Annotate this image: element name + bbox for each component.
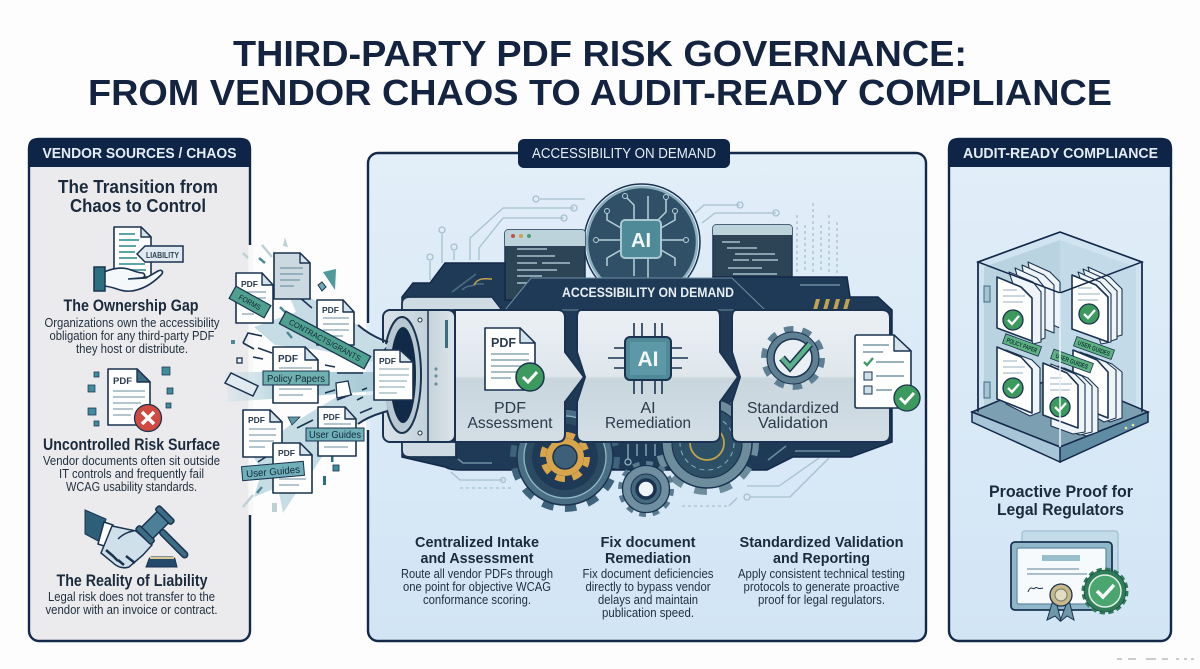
document: forms [229, 273, 273, 323]
fix document remediation text: delays and maintain [598, 593, 698, 607]
document stack: bottom left: POLICY PAPER [1005, 337, 1038, 355]
accessibility header plate: ACCESSIBILITY ON DEMAND [562, 285, 734, 300]
machine body [402, 263, 892, 470]
label: Standardized [747, 400, 839, 417]
yellow gear [543, 435, 587, 479]
icon: failing PDF: PDF [113, 376, 132, 387]
tag: user guides lower: User Guides [246, 465, 301, 480]
label [747, 400, 839, 432]
panel header: audit-ready: AUDIT-READY COMPLIANCE [963, 146, 1158, 162]
document: PDF upper right: PDF [322, 305, 339, 315]
text block: ownership gap: The Ownership Gap [64, 297, 198, 315]
centralized intake text: conformance scoring. [423, 593, 531, 607]
title: FROM VENDOR CHAOS TO AUDIT-READY COMPLIANCE [88, 72, 1112, 113]
fix document remediation text: Fix document [600, 534, 696, 551]
document: lower left [243, 410, 282, 457]
document: policy papers [263, 347, 329, 403]
cylinder housing [383, 297, 502, 457]
icon: liability document and hand: LIABILITY [146, 251, 180, 260]
text block: uncontrolled risk surface: IT controls and frequently fail [59, 467, 204, 481]
label: PDF [494, 400, 526, 417]
document stack: bottom left [997, 334, 1042, 416]
standardized validation text [738, 534, 905, 607]
circuit lines [427, 196, 837, 506]
AI chip: AI [631, 230, 651, 252]
standardized validation text: protocols to generate proactive [744, 580, 900, 594]
icon: failing PDF [88, 367, 173, 432]
label [468, 400, 553, 432]
text block: uncontrolled risk surface [43, 436, 220, 494]
text block: uncontrolled risk surface: Uncontrolled Risk Surface [43, 436, 220, 454]
heading: proactive proof [989, 483, 1134, 519]
document: forms: PDF [241, 279, 258, 289]
text block: reality of liability: vendor with an invoice or contract. [46, 603, 218, 617]
fix document remediation text: Fix document deficiencies [582, 567, 714, 581]
glass cabinet of documents [972, 232, 1148, 462]
document: policy papers: PDF [278, 354, 298, 365]
document: entering cylinder: PDF [379, 356, 396, 366]
document: gray [274, 253, 310, 299]
vendor document chaos stream [225, 237, 413, 515]
document stack: top right [1072, 267, 1122, 344]
text block: reality of liability: The Reality of Liability [56, 572, 208, 590]
faint footer mark [1117, 658, 1194, 660]
badge [1084, 570, 1126, 612]
panel: accessibility on demand [368, 139, 926, 641]
label [605, 400, 691, 432]
icon: checklist [855, 335, 920, 411]
icon: handshake and gavel [85, 505, 199, 569]
browser window left [505, 230, 585, 302]
tag: user guides right: User Guides [309, 430, 361, 441]
fix document remediation text [582, 534, 714, 620]
centralized intake text: one point for objective WCAG [403, 580, 551, 594]
tag: forms: FORMS [237, 293, 262, 312]
AI circuit circle [584, 184, 700, 300]
text block: ownership gap [44, 297, 220, 356]
label: Assessment [468, 415, 553, 432]
text block: reality of liability: Legal risk does not transfer to the [48, 590, 215, 604]
heading: transition: The Transition from [58, 177, 218, 197]
heading: proactive proof: Legal Regulators [997, 501, 1124, 519]
step 1 card [455, 310, 584, 442]
title: THIRD-PARTY PDF RISK GOVERNANCE: [233, 33, 967, 74]
heading: transition: Chaos to Control [70, 196, 206, 216]
gear: large dark [514, 406, 616, 508]
code window right [713, 225, 792, 297]
document: lower left: PDF [248, 415, 265, 425]
text block: ownership gap: obligation for any third-party PDF [50, 329, 215, 343]
label: AI [640, 400, 656, 417]
text block: uncontrolled risk surface: WCAG usability standards. [66, 480, 197, 494]
gear: small [620, 464, 672, 514]
document: user guides right [306, 407, 364, 456]
document: user guides right: PDF [323, 412, 340, 422]
seal [1047, 584, 1074, 621]
label: Validation [758, 415, 828, 432]
centralized intake text [401, 534, 553, 607]
document stack: top left [997, 262, 1060, 344]
icon: AI chip: AI [638, 348, 658, 371]
document stack: bottom right [1073, 336, 1122, 422]
step 2 card [577, 310, 738, 442]
tag: contracts and grants: CONTRACTS/GRANTS [287, 318, 362, 363]
centralized intake text: Route all vendor PDFs through [401, 567, 553, 581]
fix document remediation text: directly to bypass vendor [586, 580, 710, 594]
standardized validation text: proof for legal regulators. [758, 593, 885, 607]
tag: policy papers: Policy Papers [267, 374, 325, 385]
title [88, 33, 1112, 113]
text block: ownership gap: Organizations own the accessibility [44, 316, 220, 330]
text block: reality of liability [46, 572, 218, 617]
glass frame [978, 232, 1142, 447]
heading: proactive proof: Proactive Proof for [989, 483, 1134, 501]
accessibility header plate [505, 278, 765, 310]
standardized validation text: and Reporting [773, 550, 870, 567]
heading: transition [58, 177, 218, 216]
text block: ownership gap: they host or distribute. [76, 342, 188, 356]
panel header: audit-ready [948, 138, 1172, 167]
panel header: vendor sources [28, 138, 251, 167]
document stack: bottom middle [1043, 349, 1098, 436]
fix document remediation text: Remediation [605, 550, 691, 567]
gear: large right [659, 395, 755, 491]
document: entering cylinder [374, 350, 413, 400]
icon: certificate with badge [1011, 531, 1126, 621]
icon: gear with check [765, 330, 821, 386]
standardized validation text: Standardized Validation [740, 534, 904, 551]
panel label pill [518, 139, 730, 168]
panel: audit-ready compliance [948, 138, 1172, 641]
fix document remediation text: publication speed. [602, 606, 694, 620]
centralized intake text: and Assessment [420, 550, 534, 567]
panel label pill: ACCESSIBILITY ON DEMAND [532, 146, 716, 162]
icon: liability document and hand [94, 227, 183, 291]
icon: AI chip [608, 323, 688, 394]
document stack: bottom middle: USER GUIDES [1054, 353, 1089, 371]
icon: PDF check: PDF [491, 336, 516, 350]
standardized validation text: Apply consistent technical testing [738, 567, 905, 581]
text block: uncontrolled risk surface: Vendor documents often sit outside [43, 454, 220, 468]
document: PDF upper right [317, 300, 354, 345]
step 3 card [732, 310, 920, 442]
document: user guides lower [242, 443, 312, 493]
document: user guides lower: PDF [278, 448, 295, 458]
panel: vendor sources [28, 138, 251, 641]
document stack: bottom right: USER GUIDES [1076, 340, 1111, 358]
centralized intake text: Centralized Intake [415, 534, 539, 551]
label: Remediation [605, 415, 691, 432]
base [972, 375, 1148, 462]
panel header: vendor sources: VENDOR SOURCES / CHAOS [42, 146, 237, 162]
